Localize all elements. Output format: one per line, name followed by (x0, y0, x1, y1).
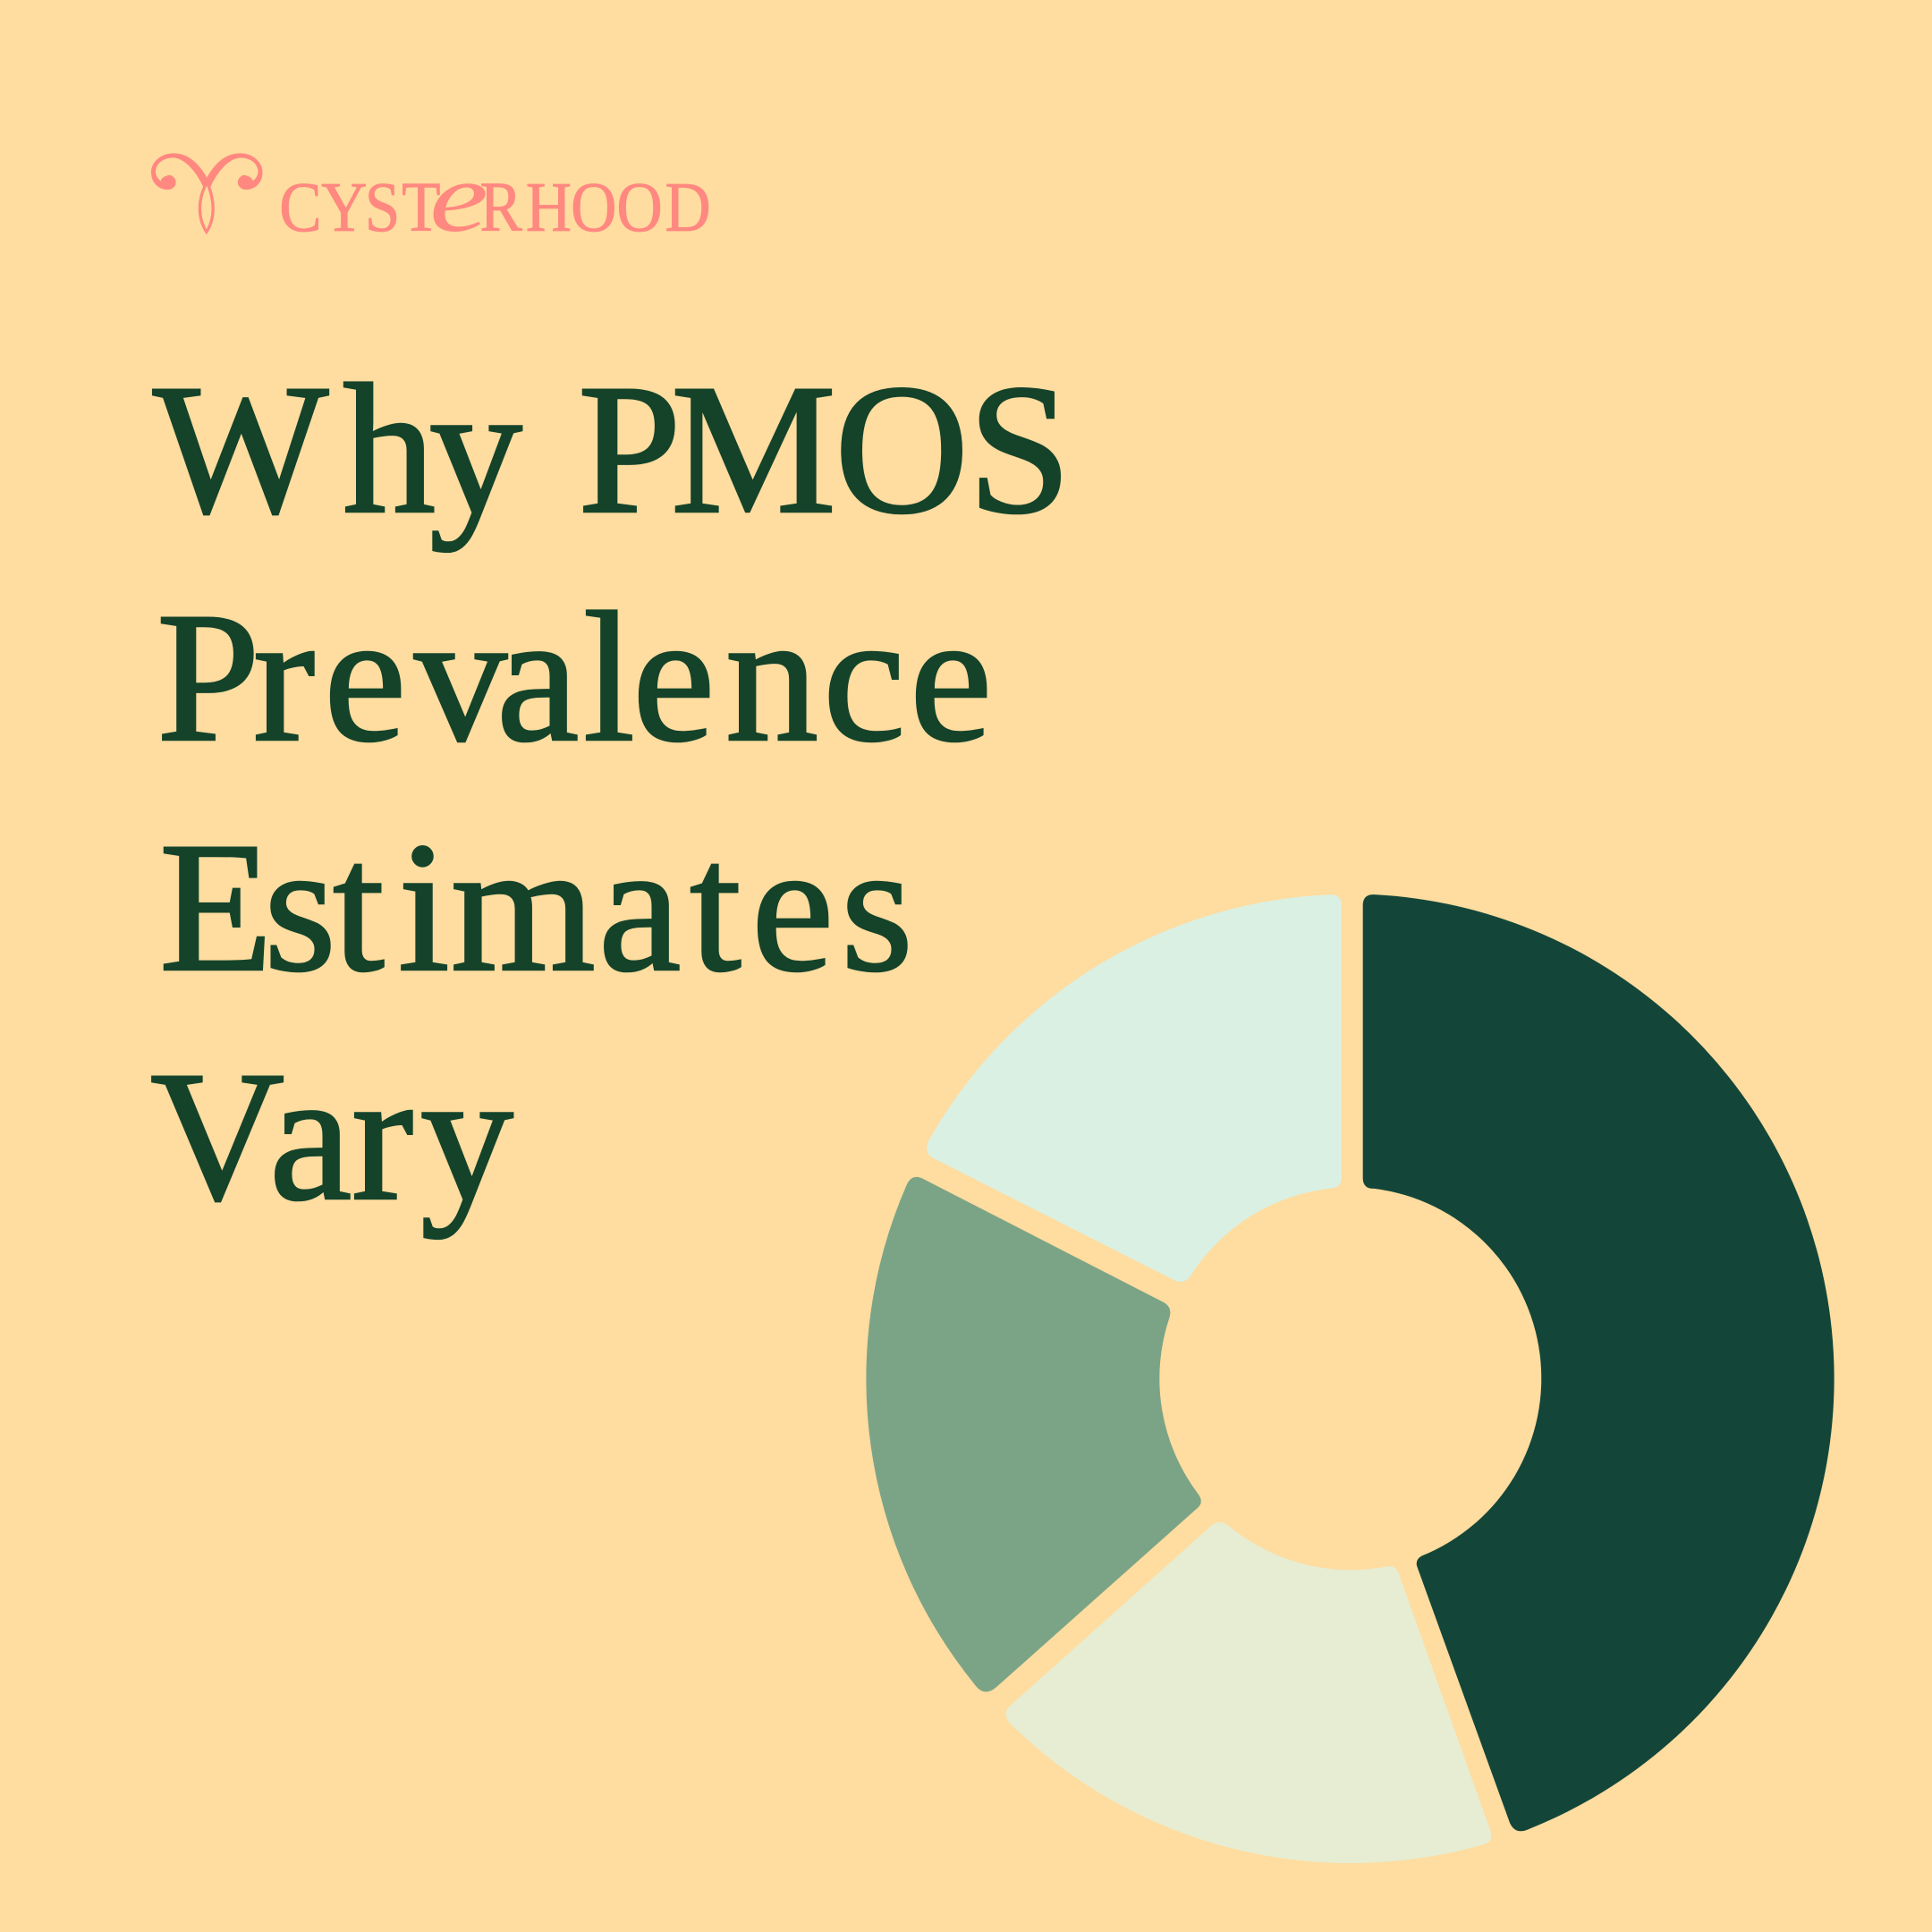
logo wordmark: CYST (279, 169, 441, 247)
title: Why PMOS (153, 346, 1072, 552)
segment: dark green (1363, 894, 1835, 1831)
segment: pale mint (927, 894, 1342, 1282)
logo wordmark: RHOOD (479, 169, 711, 247)
logo wordmark (279, 142, 711, 253)
segment: pale lime (1005, 1522, 1491, 1863)
logo: Cysterhood (152, 142, 711, 253)
segment: sage green (866, 1177, 1201, 1692)
donut chart (866, 894, 1835, 1863)
title: Vary (150, 1033, 513, 1239)
title: Estimates (159, 804, 913, 1010)
logo wordmark: e (429, 142, 488, 253)
title (150, 346, 1072, 1239)
icon: uterus ornament (152, 154, 262, 232)
title: Prevalence (157, 574, 992, 780)
